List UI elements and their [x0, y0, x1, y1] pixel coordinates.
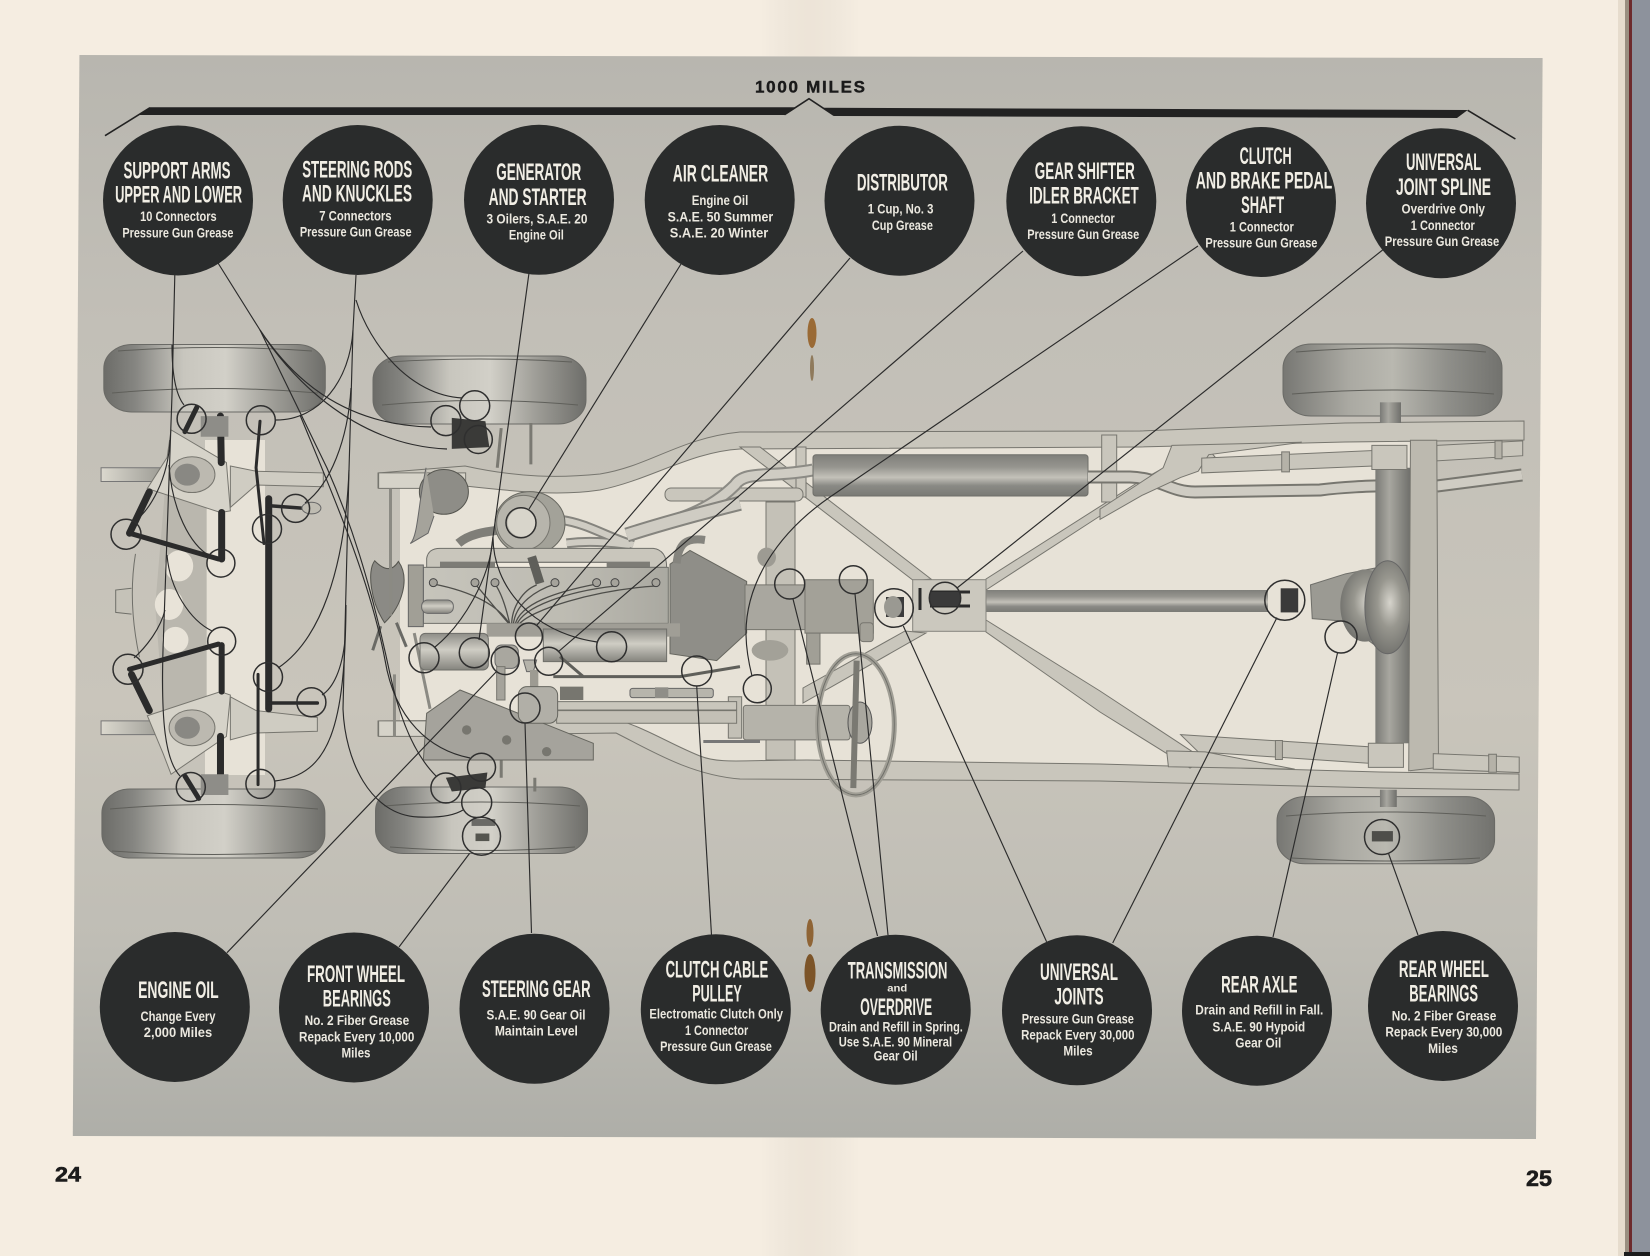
badge: front wheel bearings: BEARINGS [323, 985, 391, 1012]
badge: universal joints: Miles [1063, 1042, 1093, 1058]
badge: gear shifter idler bracket: Pressure Gun Grease [1027, 226, 1139, 242]
badge: steering gear [460, 934, 610, 1084]
badge: universal joint spline: 1 Connector [1411, 217, 1475, 233]
badge: steering gear: S.A.E. 90 Gear Oil [486, 1007, 586, 1023]
badge: universal joints: UNIVERSAL [1040, 959, 1118, 986]
badge: distributor: Cup Grease [872, 217, 933, 233]
badge: transmission and overdrive: Gear Oil [874, 1047, 918, 1063]
drive shaft [884, 580, 1268, 631]
leader: transmission and overdrive [793, 594, 888, 936]
leader: steering gear [525, 723, 532, 933]
leader: engine oil [227, 671, 497, 953]
fan and front cross members [371, 418, 535, 841]
badge: steering rods: AND KNUCKLES [302, 181, 412, 208]
badge: clutch cable pulley: Electromatic Clutch Only [649, 1006, 783, 1022]
badge: universal joint spline [1366, 128, 1516, 278]
badge: rear axle: Drain and Refill in Fall. [1195, 1002, 1323, 1018]
badge: clutch and brake pedal shaft: CLUTCH [1240, 143, 1292, 170]
badge: generator and starter: Engine Oil [509, 226, 564, 242]
front open background [205, 440, 265, 775]
rust stains [804, 318, 816, 992]
badge: distributor [824, 126, 974, 276]
badge: front wheel bearings: Miles [342, 1044, 371, 1060]
page number 25: 25 [1526, 1166, 1552, 1191]
badge: clutch cable pulley: PULLEY [692, 981, 742, 1008]
badge: support arms: Pressure Gun Grease [122, 224, 234, 240]
badge: universal joints: Repack Every 30,000 [1021, 1026, 1135, 1042]
badge: clutch and brake pedal shaft: 1 Connector [1230, 218, 1294, 234]
badge: generator and starter: 3 Oilers, S.A.E. 20 [486, 210, 588, 226]
header bracket bar [105, 99, 1515, 139]
badge: generator and starter: AND STARTER [489, 184, 587, 211]
badge: transmission and overdrive [821, 935, 971, 1085]
badge: universal joints [1002, 935, 1152, 1085]
leader lines [134, 246, 1418, 953]
badge: generator and starter [464, 125, 614, 275]
badge: steering gear: STEERING GEAR [482, 976, 591, 1003]
badge: front wheel bearings [279, 932, 429, 1082]
page number 24: 24 [55, 1164, 81, 1187]
badge: front wheel bearings: FRONT WHEEL [307, 961, 405, 988]
badge: clutch and brake pedal shaft: SHAFT [1241, 192, 1284, 219]
leader: universal joint spline [957, 250, 1383, 588]
transmission and steering column [670, 548, 894, 795]
badge: rear axle: S.A.E. 90 Hypoid [1212, 1019, 1305, 1035]
leader: air cleaner [529, 264, 681, 509]
badge: engine oil: ENGINE OIL [138, 977, 219, 1004]
badge: support arms: UPPER AND LOWER [115, 181, 242, 208]
badge: transmission and overdrive: Use S.A.E. 90 Mineral [839, 1033, 952, 1049]
badge: clutch cable pulley: CLUTCH CABLE [666, 956, 768, 983]
muffler and exhaust [640, 455, 1522, 530]
badge: clutch cable pulley [641, 934, 791, 1084]
badge: steering gear: Maintain Level [495, 1023, 578, 1039]
badge: gear shifter idler bracket: 1 Connector [1051, 210, 1115, 226]
leader: rear wheel bearings [1389, 854, 1418, 935]
leader: clutch cable pulley [697, 686, 712, 935]
rear axle assembly [1100, 402, 1523, 841]
spine shading [760, 0, 860, 1256]
badge: transmission and overdrive: TRANSMISSION [848, 958, 947, 985]
badge: engine oil: Change Every [140, 1008, 216, 1024]
badge: rear wheel bearings: No. 2 Fiber Grease [1392, 1007, 1496, 1023]
open chassis background [400, 442, 1410, 782]
badge: clutch and brake pedal shaft: AND BRAKE PEDAL [1196, 167, 1332, 194]
badge: front wheel bearings: Repack Every 10,000 [299, 1028, 415, 1044]
badge: rear wheel bearings: Repack Every 30,000 [1385, 1024, 1503, 1040]
leader: universal joints [903, 618, 1277, 943]
badge: gear shifter idler bracket: IDLER BRACKET [1029, 183, 1139, 210]
badge: clutch and brake pedal shaft: Pressure Gun Grease [1205, 235, 1318, 251]
badge: transmission and overdrive: Drain and Refill in Spring. [829, 1019, 963, 1035]
badge: clutch and brake pedal shaft [1186, 127, 1336, 277]
badge: steering rods: STEERING RODS [302, 156, 412, 183]
badge: air cleaner: Engine Oil [692, 192, 748, 208]
heading: 1000 miles: 1000 MILES [755, 78, 865, 96]
badge: support arms: SUPPORT ARMS [124, 157, 230, 184]
badge: clutch cable pulley: Pressure Gun Grease [660, 1038, 772, 1054]
engine [408, 492, 740, 760]
binding edge at right [1618, 0, 1650, 1256]
tyres [102, 344, 1502, 864]
badge: distributor: 1 Cup, No. 3 [868, 201, 934, 217]
lubrication point circles [111, 391, 1400, 855]
badge: rear wheel bearings: Miles [1428, 1040, 1458, 1056]
front suspension [101, 407, 323, 798]
badge: rear wheel bearings: REAR WHEEL [1399, 956, 1489, 983]
badge: universal joints: JOINTS [1054, 983, 1104, 1010]
badge: air cleaner [645, 125, 795, 275]
badge: generator and starter: GENERATOR [496, 159, 581, 186]
leader: distributor [537, 258, 850, 625]
badge: universal joints: Pressure Gun Grease [1022, 1010, 1134, 1026]
leader: clutch and brake pedal [746, 246, 1198, 676]
chassis frame [378, 421, 1524, 790]
badge: rear axle: REAR AXLE [1221, 971, 1298, 998]
chassis illustration [101, 344, 1524, 864]
badge: steering rods: Pressure Gun Grease [300, 224, 412, 240]
leader: generator and starter [435, 273, 597, 647]
badge: engine oil [100, 932, 250, 1082]
badge: rear wheel bearings [1368, 931, 1518, 1081]
badge: transmission and overdrive: and [887, 984, 907, 995]
badge: clutch cable pulley: 1 Connector [685, 1022, 749, 1038]
badge: universal joint spline: Overdrive Only [1402, 200, 1485, 216]
badge: engine oil: 2,000 Miles [144, 1024, 212, 1040]
badge: gear shifter idler bracket [1006, 126, 1156, 276]
badge: steering rods [283, 125, 433, 275]
badge: rear axle [1182, 936, 1332, 1086]
leader: gear shifter [558, 251, 1023, 652]
badge: universal joint spline: Pressure Gun Grease [1385, 233, 1499, 249]
badge: air cleaner: AIR CLEANER [673, 160, 768, 187]
badge: front wheel bearings: No. 2 Fiber Grease [305, 1012, 409, 1028]
badge: rear axle: Gear Oil [1235, 1035, 1281, 1051]
panel: grey diagram panel [73, 55, 1543, 1139]
badge: universal joint spline: JOINT SPLINE [1396, 174, 1491, 201]
badge: rear wheel bearings: BEARINGS [1409, 981, 1478, 1008]
badge: distributor: DISTRIBUTOR [857, 170, 948, 197]
leader: rear axle [1273, 653, 1338, 937]
leaders: support arms [134, 263, 470, 776]
badge: support arms [103, 126, 253, 276]
badge: transmission and overdrive: OVERDRIVE [860, 994, 932, 1021]
badge: support arms: 10 Connectors [140, 208, 217, 224]
badge: steering rods: 7 Connectors [319, 207, 392, 223]
badge: universal joint spline: UNIVERSAL [1406, 149, 1481, 176]
badge: gear shifter idler bracket: GEAR SHIFTER [1035, 158, 1135, 185]
badge: air cleaner: S.A.E. 20 Winter [670, 225, 769, 241]
leader: front wheel bearings [399, 853, 470, 947]
badge: air cleaner: S.A.E. 50 Summer [668, 209, 774, 225]
leaders: steering rods [275, 275, 463, 817]
